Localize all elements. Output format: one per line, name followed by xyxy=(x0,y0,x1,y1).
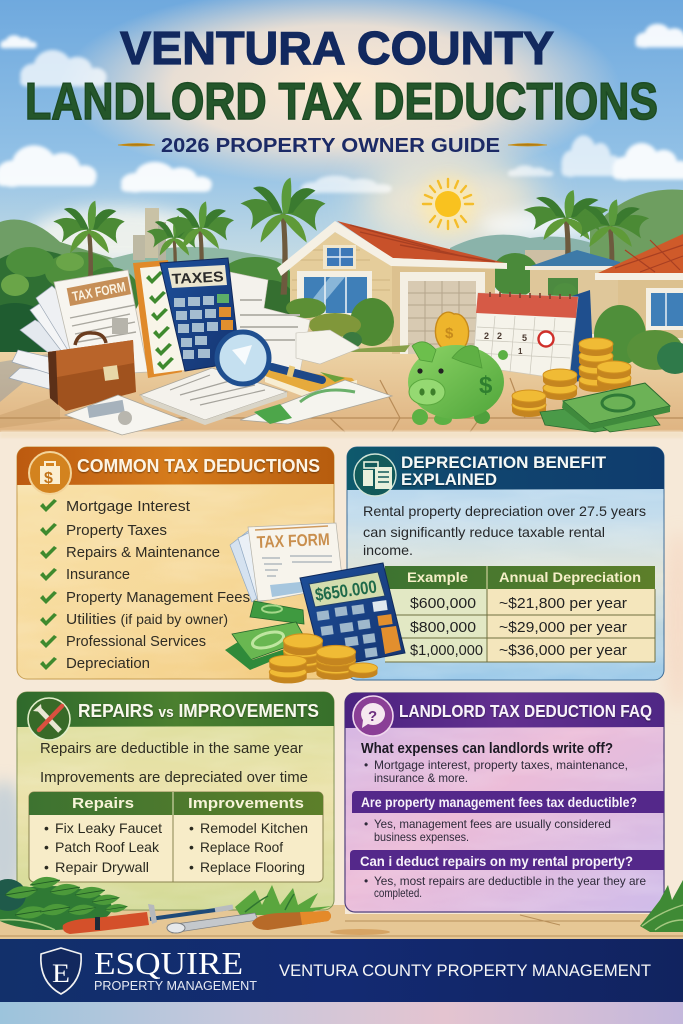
illustration: tax form, calculator, cash and coins xyxy=(225,523,405,683)
logo wordmark: ESQUIRE xyxy=(94,945,243,981)
faq item 3: • xyxy=(364,874,368,888)
title xyxy=(25,22,658,131)
table: repairs vs improvements: • xyxy=(189,859,194,875)
faq item 2: Are property management fees tax deductible? xyxy=(361,794,637,810)
illustration: magnifying glass xyxy=(217,332,322,384)
table: repairs vs improvements: Fix Leaky Faucet xyxy=(55,820,162,836)
illustration: coin stacks and cash xyxy=(512,338,670,432)
depreciation description: can significantly reduce taxable rental xyxy=(363,524,605,540)
panel: landlord tax deduction faq xyxy=(345,693,664,912)
illustration: calendar: 2 xyxy=(497,331,502,341)
table: repairs vs improvements: • xyxy=(44,820,49,836)
panel header: navy band xyxy=(347,447,664,490)
deductions checklist: Property Taxes xyxy=(66,522,167,539)
table: repairs vs improvements: Remodel Kitchen xyxy=(200,820,308,836)
illustration: hand tools xyxy=(63,904,331,934)
table: depreciation examples: $1,000,000 xyxy=(410,643,483,659)
faq item 1: insurance & more. xyxy=(374,771,468,785)
panel: common tax deductions xyxy=(17,447,334,679)
faq item 3: Can i deduct repairs on my rental property? xyxy=(360,853,633,869)
illustration: briefcase xyxy=(48,333,136,411)
deductions checklist: Depreciation xyxy=(66,655,150,672)
table: repairs vs improvements: • xyxy=(44,839,49,855)
illustration: calendar: 5 xyxy=(522,333,527,343)
icon: crossed wrench and screwdriver xyxy=(28,698,70,740)
table: repairs vs improvements: Repair Drywall xyxy=(55,859,149,875)
depreciation description: Rental property depreciation over 27.5 years xyxy=(363,503,646,519)
deductions checklist: Property Management Fees xyxy=(66,589,250,606)
panel header: green band xyxy=(17,692,334,727)
deductions checklist: Repairs & Maintenance xyxy=(66,544,220,561)
heading: common tax deductions: COMMON TAX DEDUCTIONS xyxy=(77,455,320,476)
illustration: taxes calculator: TAXES xyxy=(171,269,224,288)
table: repairs vs improvements: Replace Flooring xyxy=(200,859,305,875)
table: repairs vs improvements: • xyxy=(189,820,194,836)
illustration: far right foliage xyxy=(640,880,683,932)
heading: depreciation benefit explained: EXPLAINED xyxy=(401,470,497,489)
faq item 2: • xyxy=(364,817,368,831)
scene: hills, town and trees xyxy=(0,178,683,367)
illustration: left foliage xyxy=(0,877,128,930)
faq item 2: business expenses. xyxy=(374,830,469,844)
icon: esquire shield logo xyxy=(41,948,81,994)
illustration: neighbouring houses xyxy=(525,234,683,374)
table: depreciation examples: $600,000 xyxy=(410,596,476,612)
heading: repairs vs improvements: REPAIRS vs IMPROVEMENTS xyxy=(78,700,319,721)
title: VENTURA COUNTY xyxy=(120,22,554,74)
table: repairs vs improvements: Improvements xyxy=(188,795,304,812)
table: repairs vs improvements: Patch Roof Leak xyxy=(55,839,160,855)
depreciation description xyxy=(363,503,646,558)
faq item 1: What expenses can landlords write off? xyxy=(361,741,613,757)
table: repairs vs improvements xyxy=(29,792,323,882)
table: repairs vs improvements: • xyxy=(44,859,49,875)
illustration: piggy bank xyxy=(408,312,508,425)
table: depreciation examples: ~$29,000 per year xyxy=(499,620,627,636)
repairs and improvements explanation xyxy=(40,741,308,786)
illustration: piggy bank: $ xyxy=(479,372,493,399)
icon: question bubble: ? xyxy=(368,708,377,725)
panel header: orange band xyxy=(17,447,334,485)
icon: esquire shield logo: E xyxy=(52,959,70,988)
heading: landlord tax deduction faq: LANDLORD TAX DEDUCTION FAQ xyxy=(399,701,652,721)
sky background with clouds xyxy=(0,0,683,290)
faq item 1: • xyxy=(364,758,368,772)
logo wordmark xyxy=(94,945,257,993)
illustration: tax paper stacks: TAX FORM xyxy=(71,279,127,304)
illustration: piggy bank: $ xyxy=(445,325,454,342)
panel: repairs vs improvements xyxy=(17,692,334,910)
repairs and improvements explanation: Repairs are deductible in the same year xyxy=(40,741,303,757)
illustration: calendar: 2 xyxy=(484,331,489,341)
table: depreciation examples: ~$36,000 per year xyxy=(499,643,627,659)
illustration: checklist clipboard xyxy=(133,260,184,378)
heading: depreciation benefit explained xyxy=(401,453,607,489)
table: depreciation examples xyxy=(385,566,655,662)
deductions checklist xyxy=(40,498,250,672)
illustration: calendar: 1 xyxy=(518,347,523,356)
faq item 3: completed. xyxy=(374,886,422,900)
illustration: tax form, calculator, cash and coins: $650.000 xyxy=(314,577,378,605)
subtitle: 2026 PROPERTY OWNER GUIDE xyxy=(161,135,500,157)
table: depreciation examples: ~$21,800 per year xyxy=(499,596,627,612)
illustration: main house xyxy=(277,221,507,354)
faq item 2: Yes, management fees are usually considered xyxy=(374,817,611,831)
depreciation description: income. xyxy=(363,542,413,558)
table: depreciation examples: Annual Depreciation xyxy=(499,569,641,585)
deductions checklist: Utilities (if paid by owner) xyxy=(66,611,228,628)
icon: sun xyxy=(420,176,476,232)
panel: depreciation benefit explained xyxy=(347,447,664,680)
table: depreciation examples: $800,000 xyxy=(410,620,476,636)
ground strip above footer xyxy=(0,905,683,939)
heading: depreciation benefit explained: DEPRECIATION BENEFIT xyxy=(401,453,607,472)
bottom watercolor strip xyxy=(0,1002,683,1024)
repairs and improvements explanation: Improvements are depreciated over time xyxy=(40,770,308,786)
icon: money bag: $ xyxy=(44,470,53,487)
icon: question bubble xyxy=(353,696,393,736)
illustration: tax paper stacks xyxy=(9,270,360,392)
illustration: taxes calculator xyxy=(160,258,240,371)
footer tagline: VENTURA COUNTY PROPERTY MANAGEMENT xyxy=(279,962,651,980)
logo wordmark: PROPERTY MANAGEMENT xyxy=(94,979,257,993)
illustration: right foliage in tool area xyxy=(235,885,332,915)
faq item 3 xyxy=(350,850,664,900)
deductions checklist: Insurance xyxy=(66,566,130,583)
faq item 1: Mortgage interest, property taxes, maintenance, xyxy=(374,758,628,772)
panel header: purple band xyxy=(345,693,664,728)
illustration: tax form, calculator, cash and coins: TAX FORM xyxy=(256,530,330,552)
faq item 3: Yes, most repairs are deductible in the year they are xyxy=(374,874,646,888)
ground pavers xyxy=(0,352,683,438)
illustration: loose documents and book xyxy=(65,368,392,435)
table: repairs vs improvements: • xyxy=(189,839,194,855)
faq item 2 xyxy=(352,791,664,844)
faq item 1 xyxy=(361,741,628,785)
icon: money bag xyxy=(29,452,71,494)
table: repairs vs improvements: Replace Roof xyxy=(200,839,283,855)
footer band xyxy=(0,939,683,1002)
table: depreciation examples: Example xyxy=(407,569,468,585)
illustration: calendar xyxy=(473,290,594,383)
icon: documents xyxy=(354,454,396,496)
deductions checklist: Mortgage Interest xyxy=(66,498,191,515)
table: repairs vs improvements: Repairs xyxy=(72,795,134,812)
deductions checklist: Professional Services xyxy=(66,633,206,650)
